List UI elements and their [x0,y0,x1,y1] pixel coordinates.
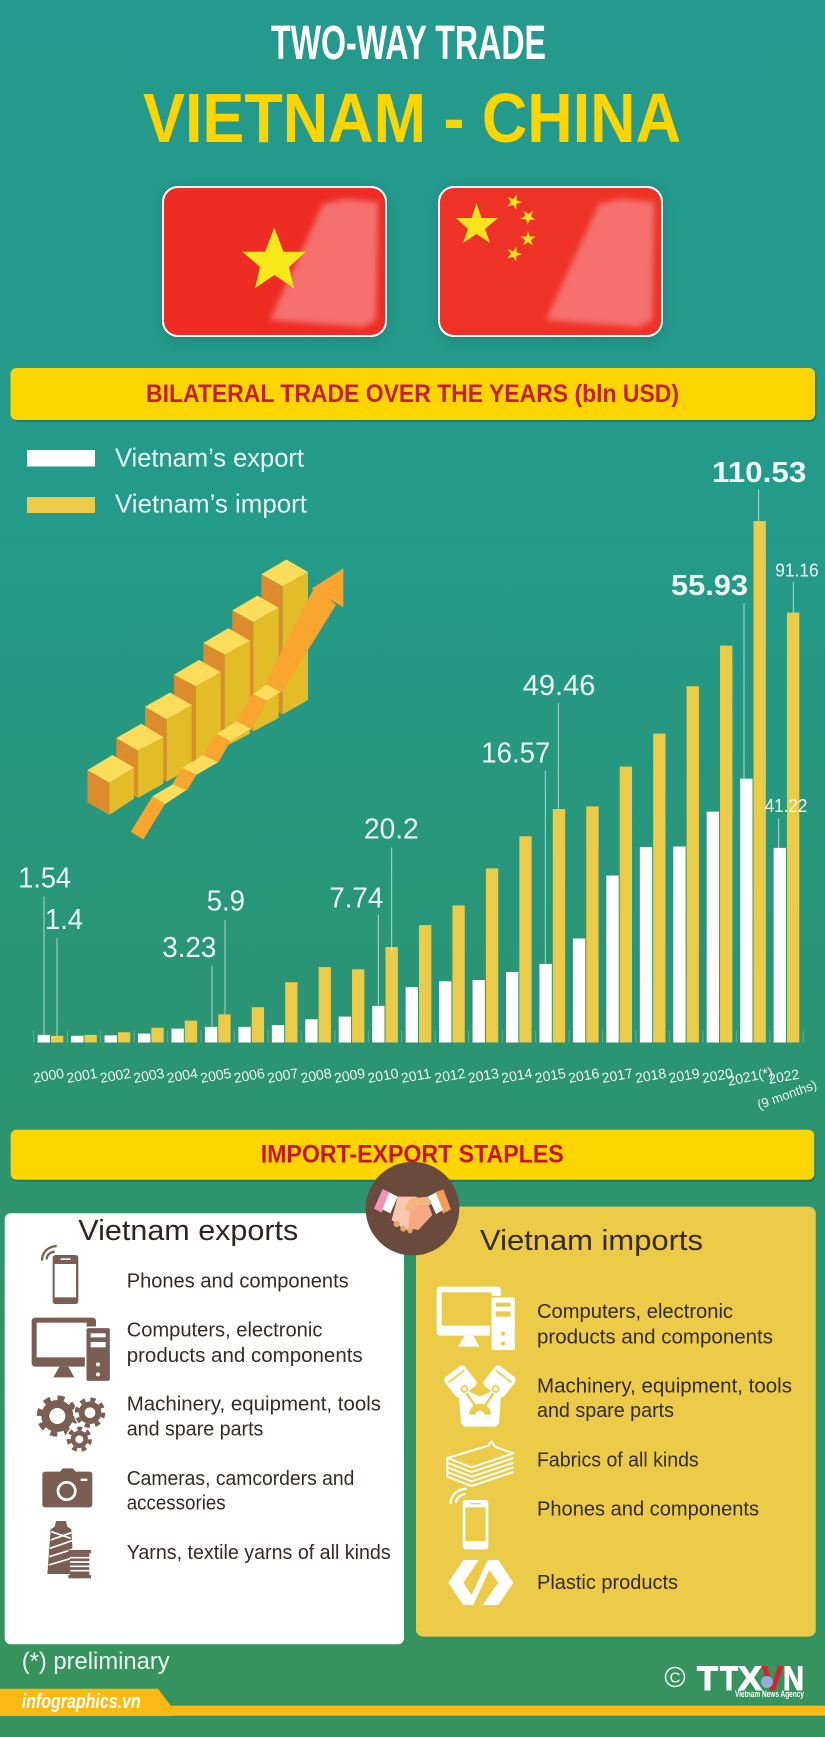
section heading: staples: IMPORT-EXPORT STAPLES [261,1140,564,1168]
year axis labels: 2013 [467,1065,500,1086]
footer tab: infographics.vn: infographics.vn [22,1691,141,1713]
value labels: 5.9 [207,885,245,917]
text: computers [537,1300,773,1348]
value labels: 110.53 [712,457,806,489]
text: phones: Phones and components [127,1269,349,1292]
bar chart [34,489,803,1043]
footnote: (*) preliminary [22,1648,170,1675]
year axis labels: (9 months) [755,1077,819,1112]
text: cameras: accessories [127,1492,226,1515]
icon: yarn [47,1521,91,1578]
icon: fabrics [447,1441,513,1486]
year axis labels: 2022 [767,1066,801,1087]
year axis labels [32,1064,819,1112]
panel: Vietnam imports [416,1207,816,1637]
icon: phone [451,1489,488,1549]
year axis labels: 2020 [701,1065,734,1086]
icon: plastic [448,1560,513,1605]
year axis labels: 2007 [266,1065,300,1086]
text: machinery: and spare parts [537,1399,674,1422]
text: plastic: Plastic products [537,1571,678,1594]
logo: TTXVN [666,1660,804,1699]
year axis labels: 2017 [600,1065,634,1086]
legend [27,442,308,518]
year axis labels: 2006 [232,1065,266,1086]
text: computers [127,1318,363,1367]
footer stripe [0,1706,825,1716]
year axis labels: 2011 [400,1065,432,1086]
value labels: 20.2 [364,814,419,846]
text: machinery [127,1392,381,1441]
year axis labels: 2003 [132,1065,166,1086]
text: yarns: Yarns, textile yarns of all kinds [127,1541,391,1564]
text: machinery: Machinery, equipment, tools [127,1392,381,1415]
value labels: 3.23 [162,932,216,964]
icon: phone [42,1246,78,1304]
text: cameras [127,1467,354,1515]
flag: China [439,187,662,340]
text: machinery [537,1375,792,1422]
logo: TTXVN: V [762,1660,783,1698]
value labels: 7.74 [329,883,383,915]
section heading: bilateral trade: BILATERAL TRADE OVER THE YEARS (bln USD) [146,380,679,408]
legend: Vietnam’s import [115,488,308,518]
value labels: 91.16 [775,560,819,580]
year axis labels: 2012 [433,1065,467,1086]
icon: computer [437,1287,516,1351]
value labels: 16.57 [481,738,550,770]
text: computers: Computers, electronic [127,1318,322,1342]
section heading: staples [11,1130,816,1182]
year axis labels: 2000 [32,1065,65,1086]
year axis labels: 2014 [500,1065,534,1086]
year axis labels: 2018 [634,1065,668,1086]
title: Vietnam - China: VIETNAM - CHINA [143,79,681,157]
year axis labels: 2004 [166,1065,199,1086]
text: computers: Computers, electronic [537,1300,733,1323]
text: fabrics: Fabrics of all kinds [537,1448,699,1471]
text: computers: products and components [537,1326,773,1348]
year axis labels: 2001 [65,1065,99,1086]
icon: gears [39,1396,106,1453]
value labels: 49.46 [523,670,595,702]
year axis labels: 2015 [534,1065,567,1086]
title: two-way trade: TWO-WAY TRADE [271,17,546,70]
legend: Vietnam’s export [115,442,305,472]
value labels: 1.4 [45,904,83,936]
heading: Vietnam imports: Vietnam imports [480,1225,703,1257]
logo: TTXVN: N [783,1660,804,1698]
icon: engine [443,1364,517,1427]
flag: Vietnam [163,187,386,340]
text: computers: products and components [127,1344,363,1367]
year axis labels: 2009 [333,1065,367,1086]
year axis labels: 2010 [366,1065,400,1086]
text: machinery: Machinery, equipment, tools [537,1375,792,1398]
year axis labels: 2005 [199,1065,233,1086]
text: machinery: and spare parts [127,1418,263,1441]
year axis labels: 2019 [667,1065,701,1086]
year axis labels: 2002 [99,1065,132,1086]
logo: TTXVN: T [720,1660,738,1698]
heading: Vietnam exports: Vietnam exports [78,1215,298,1247]
text: cameras: Cameras, camcorders and [127,1467,354,1490]
value labels: 55.93 [671,570,748,602]
year axis labels: 2008 [299,1065,333,1086]
panel: Vietnam exports [5,1213,404,1644]
value labels: 41.22 [765,796,807,816]
icon: computer [32,1318,111,1382]
section heading: bilateral trade [10,368,816,422]
logo: TTXVN: X [738,1660,762,1698]
value labels: 1.54 [18,863,71,895]
icon: camera [42,1468,92,1507]
icon: handshake [366,1162,459,1255]
logo: TTXVN: T [697,1660,718,1698]
value labels [18,457,819,964]
year axis labels: 2021(*) [726,1064,774,1089]
year axis labels: 2016 [567,1065,601,1086]
logo: TTXVN: C [670,1670,681,1686]
icon: rising bars and arrow [87,559,343,839]
text: phones: Phones and components [537,1498,759,1520]
